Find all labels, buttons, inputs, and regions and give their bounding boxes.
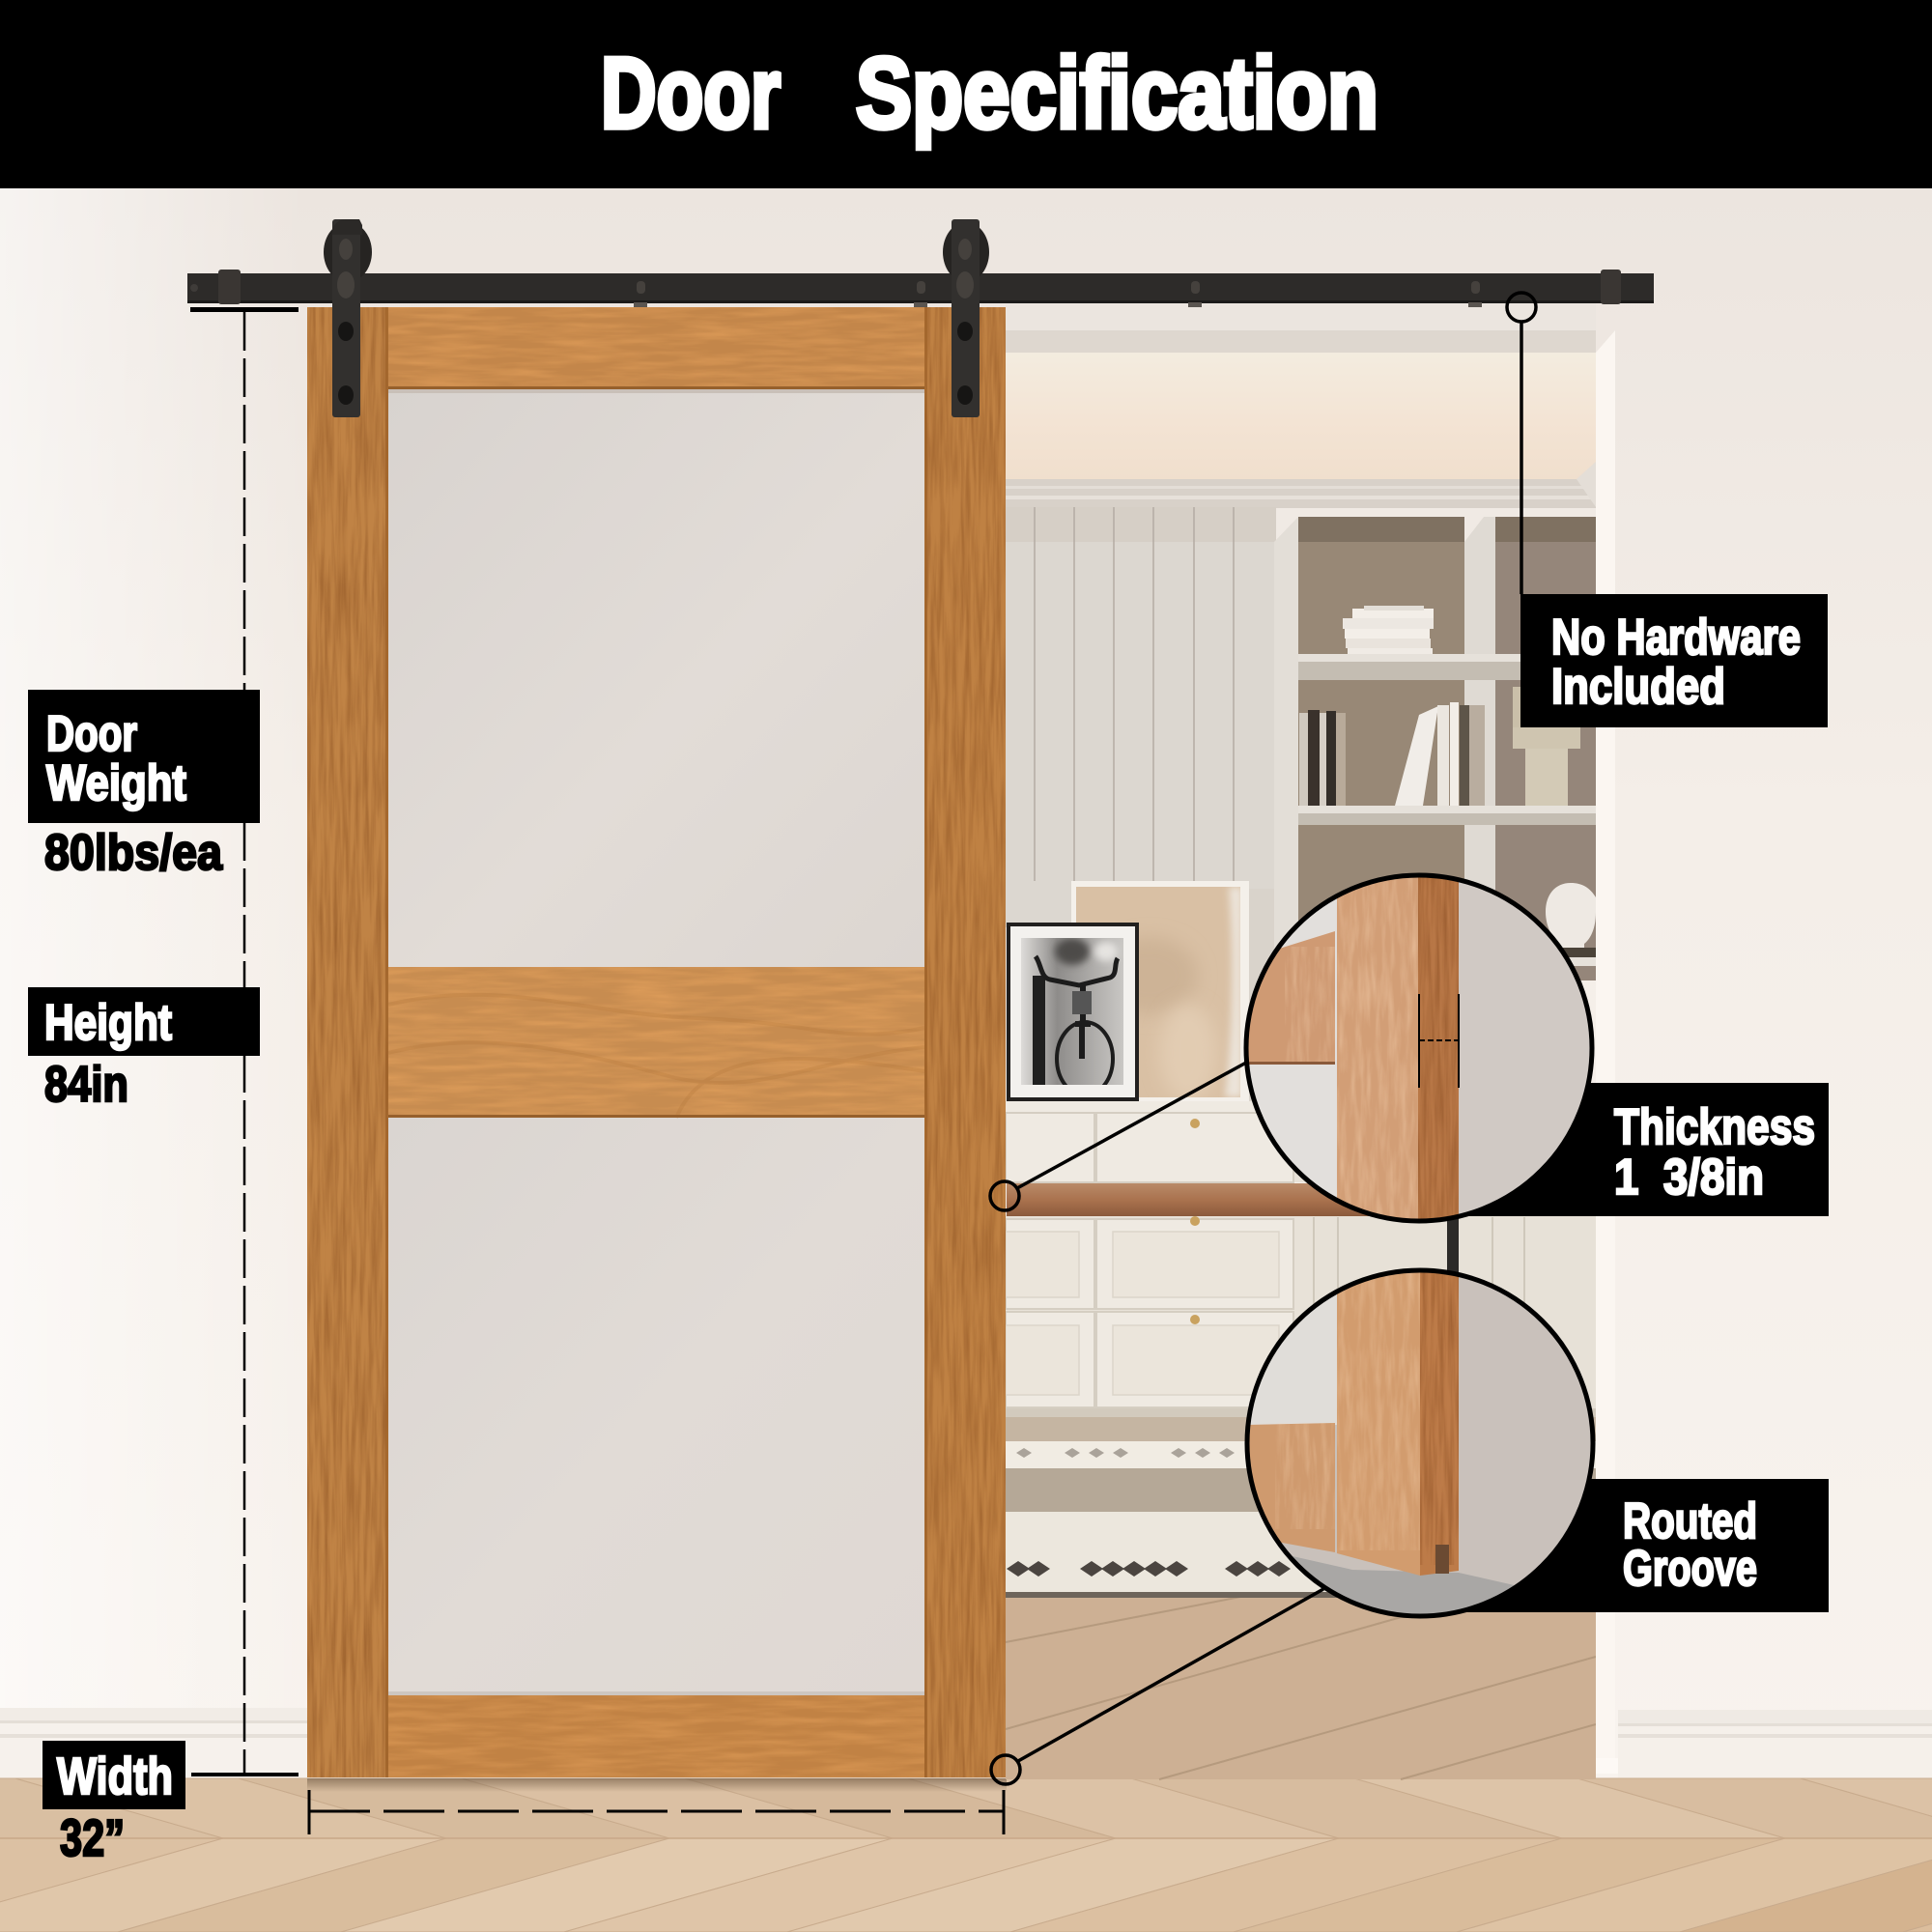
title: Specification [856, 38, 1378, 150]
floor: herringbone planks [0, 1778, 1932, 1932]
label: routed groove [1623, 1493, 1757, 1597]
tan poster [1071, 881, 1249, 1101]
title: Door [601, 38, 781, 150]
label: width [43, 1741, 185, 1867]
label: no hardware included [1520, 594, 1828, 727]
left roller hanger [324, 219, 372, 417]
room seen through opening [1006, 302, 1596, 1779]
label: thickness [1614, 1099, 1815, 1206]
stile edge [1418, 874, 1459, 1224]
bookshelf [1274, 517, 1596, 1116]
bottom rail [388, 1695, 924, 1777]
label: door weight: Door [46, 706, 137, 762]
leader lines and anchors [990, 293, 1536, 1784]
thickness marks [1419, 994, 1459, 1088]
stile edge with groove [1420, 1270, 1459, 1576]
label: no hardware included: No Hardware [1551, 610, 1801, 666]
detail circle: routed groove [1245, 1270, 1595, 1620]
callout box: routed groove [1459, 1479, 1829, 1612]
label: routed groove: Routed [1623, 1493, 1757, 1549]
barn door track [187, 270, 1654, 307]
label: width: 32” [60, 1809, 125, 1867]
stile face [1337, 874, 1418, 1224]
label: door weight: 80lbs/ea [44, 825, 223, 881]
books [1299, 606, 1485, 806]
callout box: thickness [1459, 1083, 1829, 1216]
label: width: Width [57, 1747, 173, 1805]
label: door weight: Weight [46, 755, 186, 811]
width dimension line [309, 1790, 1004, 1834]
floor, rug and cabinets [1006, 1101, 1596, 1779]
label: thickness: Thickness [1614, 1099, 1815, 1155]
label: door weight [28, 690, 260, 881]
crown molding [1006, 462, 1596, 508]
right roller hanger [943, 219, 989, 417]
right door jamb [1596, 330, 1618, 1774]
middle rail [388, 967, 924, 1118]
right stile [924, 307, 1006, 1777]
label: no hardware included: Included [1551, 659, 1725, 715]
title [601, 38, 1378, 150]
rug pattern [1007, 1561, 1291, 1577]
beadboard wall [1006, 507, 1276, 1106]
top rail [388, 307, 924, 389]
title bar [0, 0, 1932, 188]
label: thickness: 1 3/8in [1614, 1150, 1764, 1206]
label: routed groove: Groove [1623, 1541, 1757, 1597]
height dimension line [190, 307, 298, 1776]
stile face [1337, 1270, 1420, 1576]
glass panels [388, 389, 925, 1695]
label: height: 84in [44, 1057, 128, 1113]
lamp and vase [1513, 687, 1596, 957]
bicycle photo [1007, 923, 1139, 1101]
left stile [307, 307, 388, 1777]
rail [1245, 1423, 1335, 1552]
track bolts [634, 281, 1482, 307]
detail circle: thickness [1245, 874, 1595, 1224]
label: height [28, 987, 260, 1113]
track stops [218, 270, 1621, 304]
label: height: Height [44, 995, 172, 1051]
rail end [1245, 931, 1335, 1065]
baseboards [0, 1708, 1932, 1779]
door [307, 307, 1006, 1777]
